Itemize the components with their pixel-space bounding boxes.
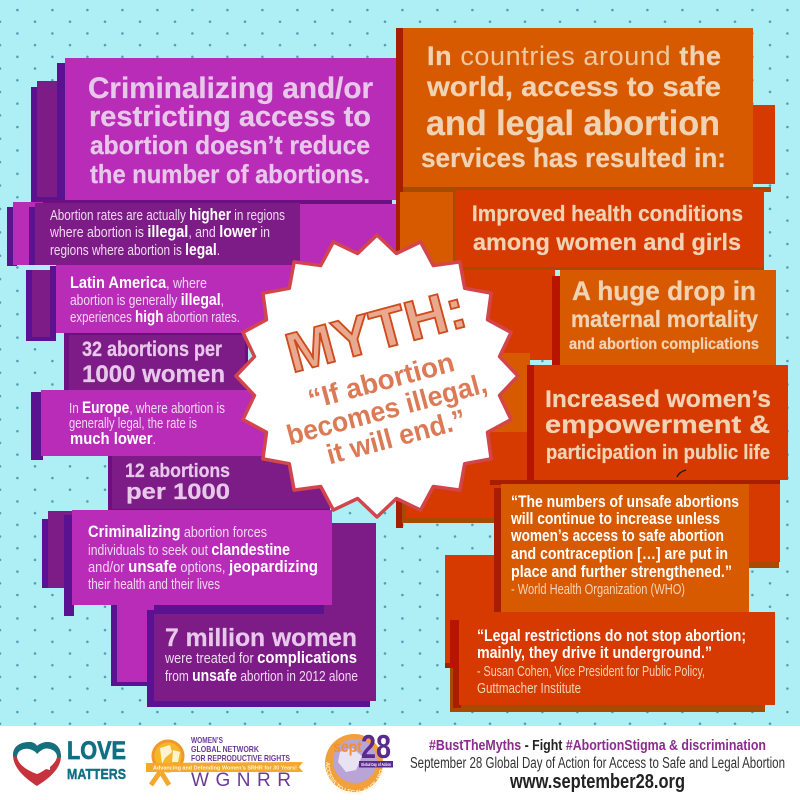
panel: WHO quote — [494, 484, 749, 612]
logo: love matters: MATTERS — [67, 766, 126, 783]
logo: love matters: LOVE — [67, 737, 126, 765]
panel: WHO quote: place and further strengthened.” — [511, 562, 732, 581]
panel: 7 million women: were treated for complications — [164, 648, 357, 667]
panel: improved health — [453, 190, 764, 270]
panel: europe: In Europe, where abortion is — [69, 398, 225, 417]
panel: europe: generally legal, the rate is — [69, 416, 197, 432]
panel: Guttmacher quote: mainly, they drive it underground.” — [477, 643, 712, 662]
callout: myth starburst — [236, 235, 518, 517]
panel: europe — [41, 390, 301, 456]
panel: empowerment: empowerment & — [545, 411, 770, 439]
logo: sept 28: ACCESS TO LEGAL SAFE ABORTION — [326, 762, 384, 794]
panel: 32 abortions stat: 1000 women — [82, 361, 225, 388]
logo: sept 28 — [325, 728, 393, 794]
panel: latin america: experiences high abortion rates. — [70, 307, 240, 326]
panel: WHO quote: women’s access to safe abortion — [510, 526, 724, 545]
panel: 32 abortions stat — [64, 333, 248, 393]
logo: sept 28: 28 — [361, 728, 391, 765]
panel: right heading: services has resulted in: — [421, 143, 726, 173]
panel: 7 million women: 7 million women — [165, 624, 357, 652]
footer text: campaign: #BustTheMyths - Fight #AbortionStigma & discrimination — [429, 737, 766, 754]
logo: WGNRR — [146, 735, 303, 791]
panel: left purple block stack backing — [7, 63, 397, 707]
panel: Guttmacher quote — [459, 612, 775, 705]
panel: improved health: Improved health conditions — [472, 201, 743, 226]
logo: WGNRR: GLOBAL NETWORK — [191, 744, 260, 754]
panel: 12 abortions stat: 12 abortions — [125, 461, 230, 482]
heading: criminalizing and/or restricting — [88, 72, 373, 189]
panel: 12 abortions stat — [108, 456, 330, 514]
panel: europe: much lower. — [70, 429, 156, 448]
panel: right heading: and legal abortion — [426, 104, 720, 143]
panel: latin america: Latin America, where — [70, 273, 207, 292]
myth quote — [276, 340, 498, 479]
panel: Guttmacher quote: “Legal restrictions do not stop abortion; — [477, 626, 746, 645]
panel: left heading — [65, 58, 400, 200]
panel: huge drop — [552, 270, 776, 365]
panel: 7 million women — [154, 523, 376, 701]
panel: abortion rates: Abortion rates are actually higher in regions — [50, 205, 285, 224]
heading: criminalizing and/or restricting: restricting access to — [89, 101, 371, 133]
panel: right heading — [403, 28, 753, 187]
panel: latin america — [56, 265, 356, 333]
panel: criminalizing forces: Criminalizing abortion forces — [88, 522, 267, 541]
panel: right heading: world, access to safe — [426, 71, 721, 102]
panel: right heading: In countries around the — [427, 41, 721, 71]
panel: improved health: among women and girls — [473, 229, 741, 255]
panel: latin america: abortion is generally illegal, — [70, 290, 224, 309]
footer text: campaign — [410, 737, 785, 793]
logo: love matters — [13, 737, 126, 786]
logo: WGNRR: FOR REPRODUCTIVE RIGHTS — [191, 753, 290, 763]
heading: criminalizing and/or restricting: the number of abortions. — [90, 159, 370, 189]
myth quote: becomes illegal, — [283, 368, 490, 451]
panel: empowerment: Increased women’s — [545, 386, 771, 413]
panel: 12 abortions stat: per 1000 — [126, 479, 230, 504]
panel: criminalizing forces: individuals to seek out clandestine — [88, 540, 290, 559]
logo: WGNRR: WGNRR — [191, 770, 291, 791]
logo: WGNRR: WOMEN’S — [191, 735, 223, 745]
panel: criminalizing forces: and/or unsafe options, jeopardizing — [88, 557, 318, 576]
logo: sept 28: Global Day of Action — [361, 762, 391, 767]
panel: huge drop: maternal mortality — [571, 306, 758, 332]
panel: abortion rates — [13, 202, 300, 265]
myth title: MYTH: — [279, 276, 473, 385]
myth quote: “If abortion — [305, 346, 458, 415]
panel: empowerment — [534, 365, 788, 480]
heading: criminalizing and/or restricting: Criminalizing and/or — [88, 72, 373, 105]
panel: right orange block stack backing — [396, 28, 780, 712]
panel: Guttmacher quote: Guttmacher Institute — [477, 680, 581, 697]
panel: WHO quote: - World Health Organization (WHO) — [511, 581, 685, 598]
logo: WGNRR: Advancing and Defending Women’s SRHR for 30 Years! — [153, 766, 297, 772]
panel: abortion rates: regions where abortion is legal. — [50, 240, 220, 259]
panel: WHO quote: “The numbers of unsafe abortions — [511, 492, 739, 511]
myth quote: it will end.” — [323, 403, 469, 470]
panel: 7 million women: from unsafe abortion in 2012 alone — [165, 666, 358, 685]
panel: WHO quote: will continue to increase unless — [510, 509, 720, 528]
logo: sept 28: sept — [333, 739, 363, 756]
panel: criminalizing forces — [72, 510, 332, 605]
panel: criminalizing forces: their health and their lives — [88, 577, 220, 593]
footer text: campaign: www.september28.org — [509, 771, 685, 793]
panel: empowerment: participation in public life — [546, 442, 770, 464]
panel: abortion rates: where abortion is illegal, and lower in — [49, 222, 270, 241]
panel: huge drop: A huge drop in — [572, 276, 756, 306]
panel: huge drop: and abortion complications — [569, 336, 759, 353]
footer band — [0, 726, 800, 800]
heading: criminalizing and/or restricting: abortion doesn’t reduce — [90, 130, 370, 160]
panel: WHO quote: and contraception […] are put in — [511, 544, 728, 563]
panel: Guttmacher quote: - Susan Cohen, Vice President for Public Policy, — [477, 663, 705, 680]
panel: 32 abortions stat: 32 abortions per — [82, 338, 222, 361]
